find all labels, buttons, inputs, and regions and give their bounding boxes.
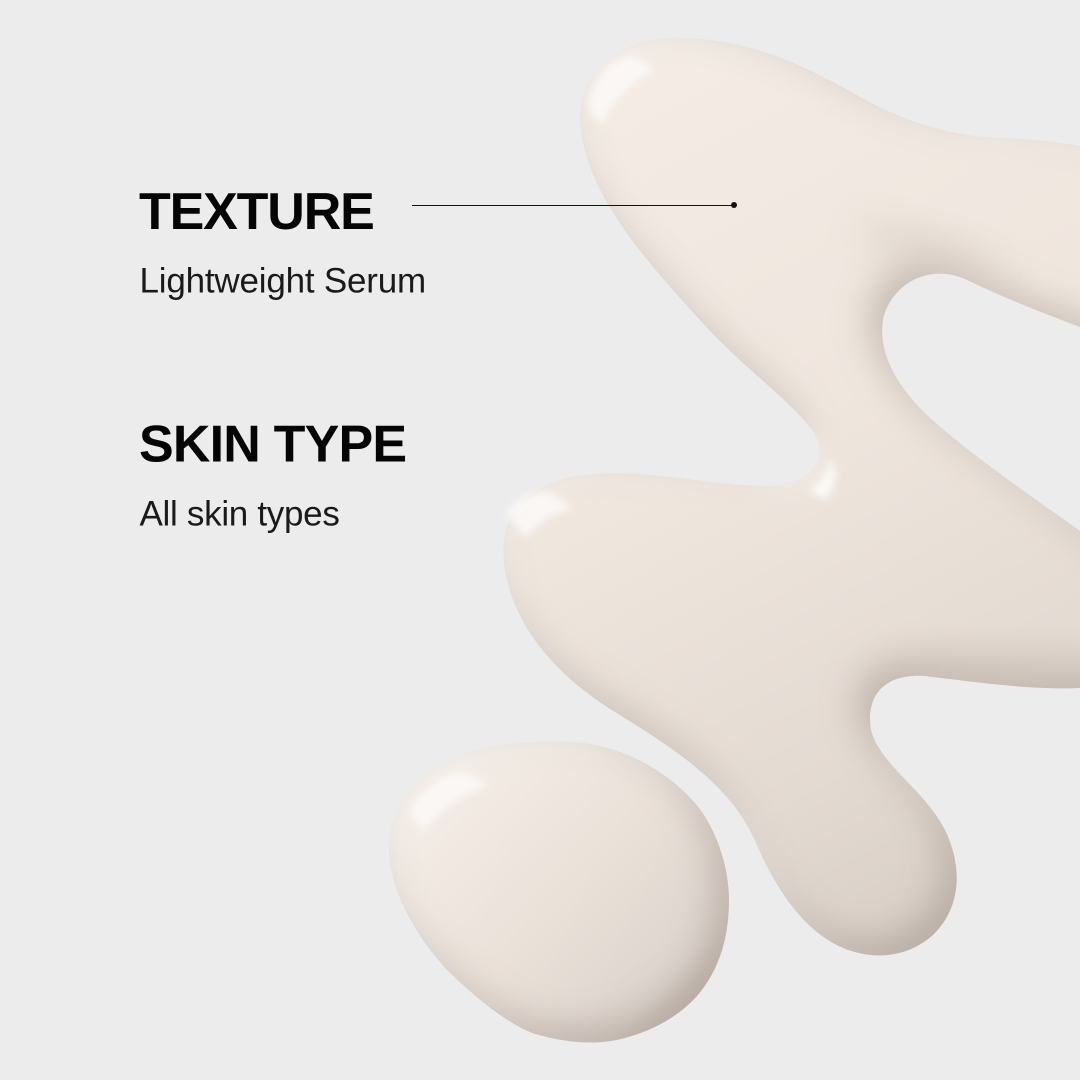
highlight: neck bbox=[808, 458, 835, 500]
skin type heading: SKIN TYPE bbox=[139, 416, 406, 474]
leader line with dot bbox=[412, 202, 737, 208]
highlight: top lobe bbox=[588, 56, 654, 126]
small serum drop bbox=[389, 741, 729, 1043]
large serum swatch bbox=[504, 38, 1080, 955]
texture heading: TEXTURE bbox=[139, 183, 374, 241]
texture description: Lightweight Serum bbox=[140, 262, 426, 300]
highlight: middle lobe bbox=[506, 492, 572, 538]
skin type description: All skin types bbox=[140, 494, 340, 534]
highlight: small drop bbox=[409, 772, 488, 832]
